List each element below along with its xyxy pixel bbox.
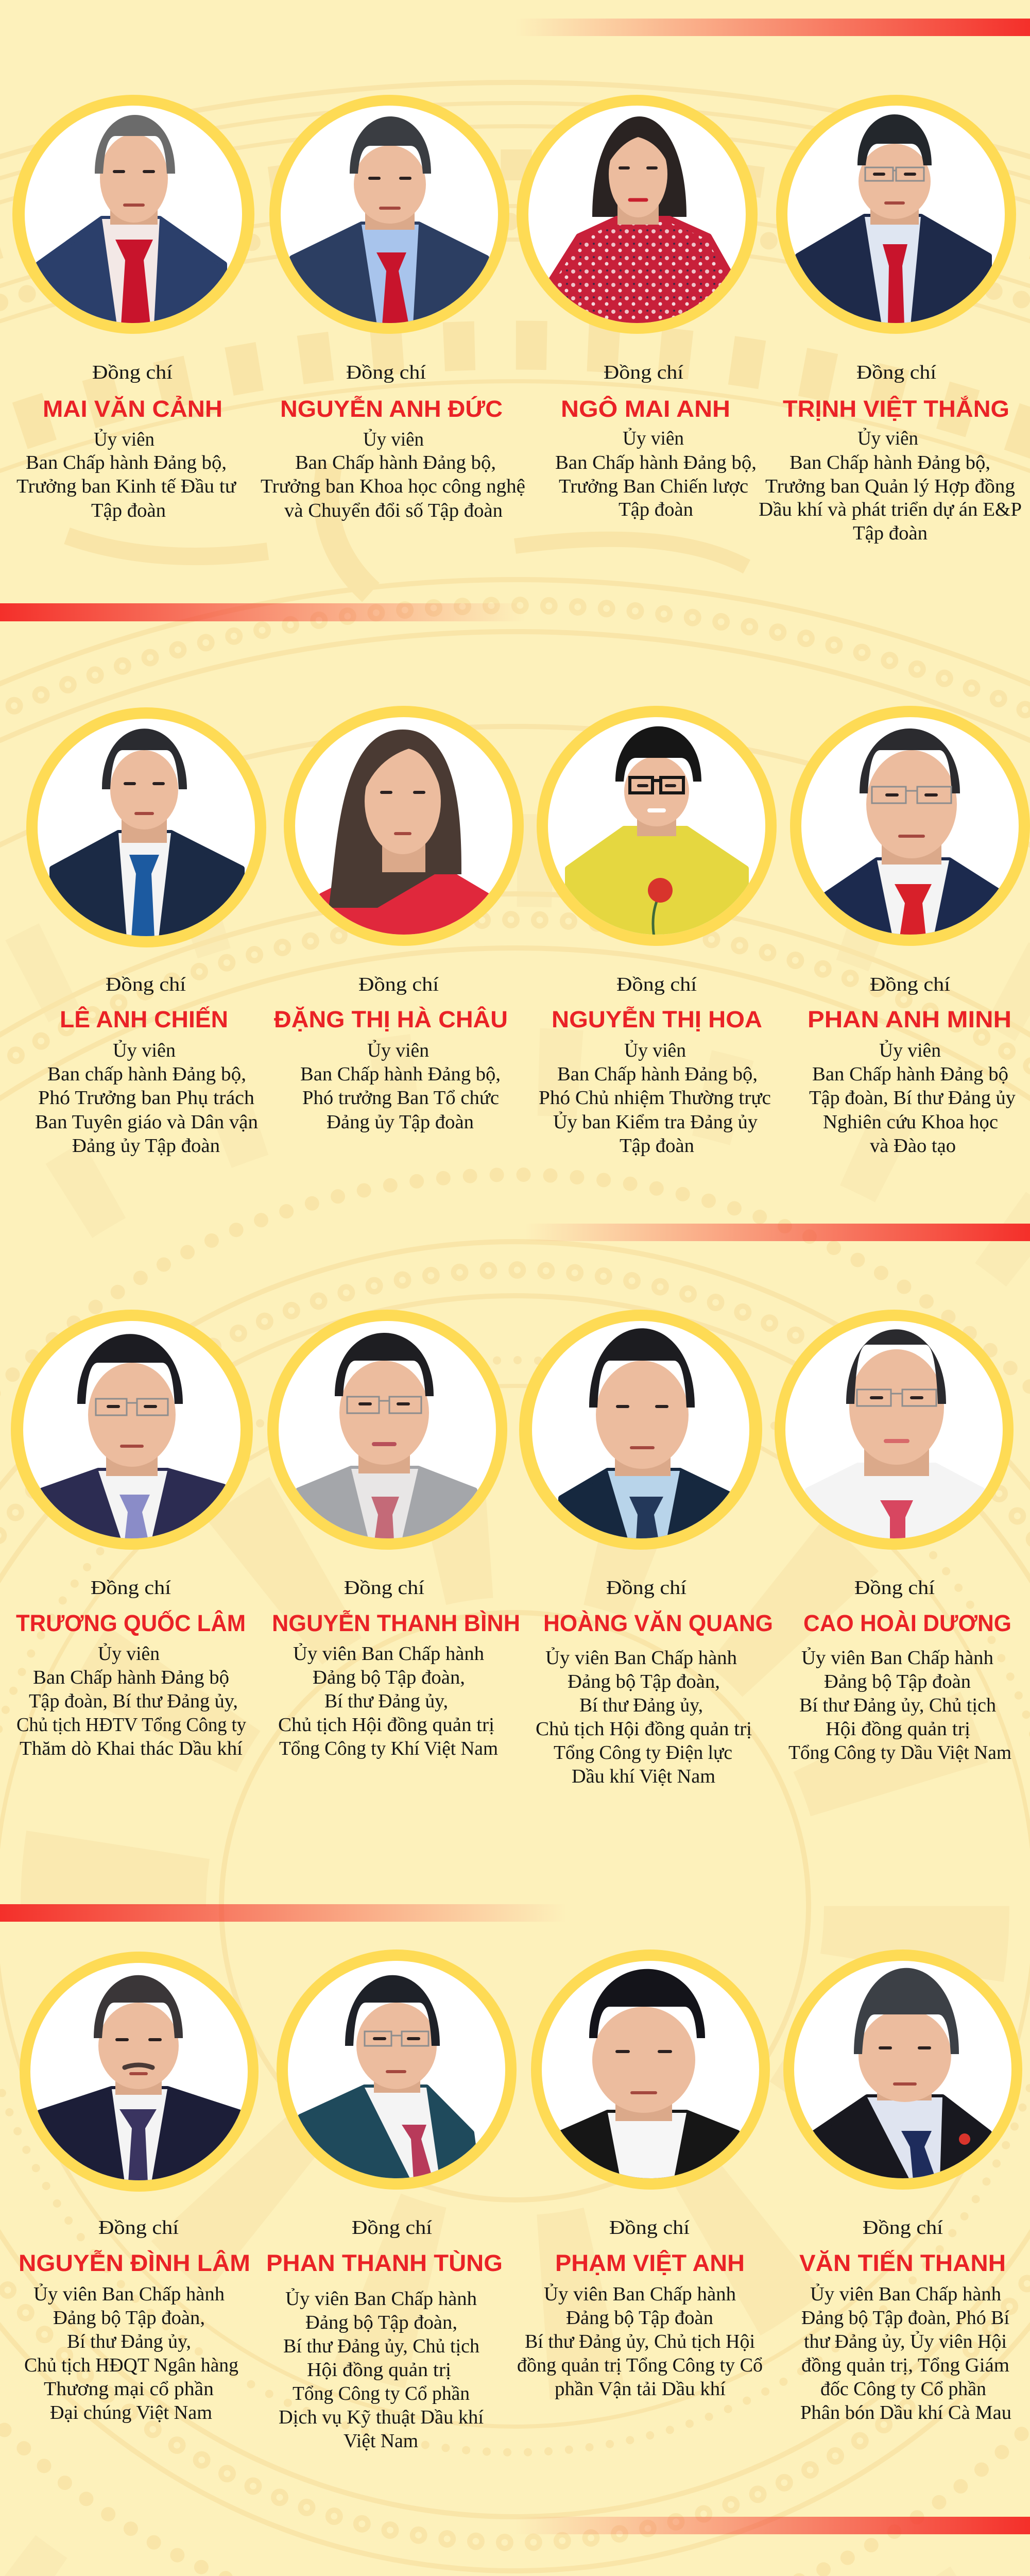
role: Ban Chấp hành Đảng bộ <box>812 1063 1008 1085</box>
photo frame <box>26 707 266 947</box>
role: Việt Nam <box>344 2430 418 2452</box>
member: Phạm Việt Anh <box>517 1950 770 2400</box>
role: Chủ tịch HĐTV Tổng Công ty <box>16 1714 246 1736</box>
role: Đảng bộ Tập đoàn <box>566 2307 713 2329</box>
role: Bí thư Đảng ủy, <box>324 1690 448 1712</box>
accent bar 4 <box>0 1904 566 1922</box>
portrait <box>787 106 1005 323</box>
photo frame <box>277 1950 517 2190</box>
portrait <box>25 106 242 323</box>
role: Tập đoàn <box>619 499 693 520</box>
portrait <box>527 1316 754 1553</box>
photo frame <box>537 706 777 946</box>
member: Nguyễn Anh Đức <box>261 95 525 521</box>
role: Bí thư Đảng ủy, <box>579 1694 703 1716</box>
role: Ủy viên Ban Chấp hành <box>33 2283 225 2305</box>
name: CAO HOÀI DƯƠNG <box>803 1610 1011 1636</box>
role: Đảng bộ Tập đoàn, <box>313 1667 465 1688</box>
name: PHAN ANH MINH <box>808 1006 1011 1032</box>
label: Đồng chí <box>91 1577 171 1599</box>
role: Ủy viên Ban Chấp hành <box>810 2283 1001 2305</box>
portrait <box>789 1956 1016 2193</box>
role: Thương mại cổ phần <box>44 2378 214 2400</box>
role: Trưởng ban Kinh tế Đầu tư <box>16 476 236 497</box>
role: Đảng bộ Tập đoàn, <box>53 2307 205 2329</box>
name: ĐẶNG THỊ HÀ CHÂU <box>274 1006 508 1032</box>
name: NGUYỄN ĐÌNH LÂM <box>19 2250 250 2276</box>
role: Hội đồng quản trị <box>307 2359 451 2381</box>
name: HOÀNG VĂN QUANG <box>543 1610 773 1636</box>
role: đồng quản trị Tổng Công ty Cổ <box>517 2354 763 2376</box>
photo frame <box>284 706 524 946</box>
photo frame <box>775 1310 1014 1550</box>
name: MAI VĂN CẢNH <box>43 396 222 422</box>
role: Bí thư Đảng ủy, Chủ tịch <box>283 2335 479 2357</box>
label: Đồng chí <box>344 1577 424 1599</box>
role: Ủy ban Kiểm tra Đảng ủy <box>553 1111 758 1133</box>
role: Ban Chấp hành Đảng bộ, <box>557 1063 758 1085</box>
role: Tập đoàn <box>853 522 928 544</box>
role: Ủy viên <box>857 427 918 449</box>
role: Bí thư Đảng ủy, Chủ tịch Hội <box>525 2331 755 2352</box>
role: Phân bón Dầu khí Cà Mau <box>800 2402 1011 2424</box>
role: Ủy viên <box>363 428 424 450</box>
role: Đảng bộ Tập đoàn, <box>305 2312 457 2333</box>
role: Nghiên cứu Khoa học <box>823 1111 998 1133</box>
role: Tập đoàn, Bí thư Đảng ủy <box>809 1087 1016 1109</box>
role: thư Đảng ủy, Ủy viên Hội <box>804 2330 1007 2352</box>
name: VĂN TIẾN THANH <box>799 2250 1006 2276</box>
role: đồng quản trị, Tổng Giám <box>801 2354 1009 2376</box>
role: Ủy viên <box>879 1039 941 1061</box>
photo frame <box>776 95 1016 334</box>
role: Trưởng ban Khoa học công nghệ <box>261 476 525 497</box>
label: Đồng chí <box>606 1577 686 1599</box>
role: Ủy viên <box>113 1039 176 1061</box>
role: Tổng Công ty Khí Việt Nam <box>279 1738 498 1759</box>
portrait <box>543 713 770 950</box>
role: Ủy viên <box>98 1642 160 1665</box>
photo frame <box>267 1310 507 1550</box>
role <box>800 2283 1011 2424</box>
role: Bí thư Đảng ủy, <box>67 2331 191 2352</box>
role: Ủy viên Ban Chấp hành <box>293 1642 484 1665</box>
member: Cao Hoài Dương <box>775 1310 1014 1764</box>
role: Phó trưởng Ban Tổ chức <box>302 1087 499 1109</box>
member: Đặng Thị Hà Châu <box>274 706 524 1133</box>
label: Đồng chí <box>609 2217 690 2239</box>
role: Đảng ủy Tập đoàn <box>327 1111 474 1133</box>
name: NGUYỄN THỊ HOA <box>552 1006 762 1032</box>
role: Bí thư Đảng ủy, Chủ tịch <box>799 1694 996 1716</box>
role <box>279 2287 484 2452</box>
name: PHẠM VIỆT ANH <box>555 2250 745 2276</box>
member: Nguyễn Đình Lâm <box>19 1952 259 2424</box>
role: Chủ tịch Hội đồng quản trị <box>278 1714 494 1736</box>
photo frame <box>531 1950 770 2190</box>
accent bar 5 <box>515 2517 1030 2534</box>
role: Đảng ủy Tập đoàn <box>72 1135 220 1157</box>
label: Đồng chí <box>352 2217 432 2239</box>
portrait <box>537 1956 764 2193</box>
role <box>16 428 236 521</box>
role <box>539 1039 771 1157</box>
photo frame <box>519 1310 762 1550</box>
role: Ủy viên Ban Chấp hành <box>801 1647 993 1669</box>
portrait <box>274 1316 501 1553</box>
role: Trưởng ban Quản lý Hợp đồng <box>765 476 1015 497</box>
member: Mai Văn Cảnh <box>12 95 254 521</box>
label: Đồng chí <box>92 362 173 383</box>
role: Ban Chấp hành Đảng bộ <box>33 1667 229 1688</box>
name: TRƯƠNG QUỐC LÂM <box>16 1610 246 1636</box>
role: Ủy viên <box>94 428 154 450</box>
accent bar 3 <box>525 1224 1030 1241</box>
role <box>759 427 1022 544</box>
member: Văn Tiến Thanh <box>783 1950 1022 2424</box>
role <box>261 428 525 521</box>
role: Hội đồng quản trị <box>826 1718 970 1740</box>
member: Phan Thanh Tùng <box>266 1950 517 2452</box>
role <box>517 2283 763 2400</box>
label: Đồng chí <box>98 2217 179 2239</box>
portrait <box>281 106 498 323</box>
member: Trịnh Việt Thắng <box>759 95 1022 544</box>
name: NGUYỄN ANH ĐỨC <box>280 396 503 422</box>
photo frame <box>269 95 509 334</box>
role: Tập đoàn <box>91 500 166 521</box>
label: Đồng chí <box>863 2217 943 2239</box>
label: Đồng chí <box>358 974 439 995</box>
member: Trương Quốc Lâm <box>11 1310 253 1759</box>
role: Đảng bộ Tập đoàn, Phó Bí <box>801 2307 1009 2329</box>
member: Hoàng Văn Quang <box>519 1310 773 1787</box>
role: Dịch vụ Kỹ thuật Dầu khí <box>279 2406 484 2428</box>
role: Ban Chấp hành Đảng bộ, <box>300 1063 501 1085</box>
role: Ủy viên Ban Chấp hành <box>544 2283 736 2305</box>
role <box>555 427 757 520</box>
role: Phó Chủ nhiệm Thường trực <box>539 1087 771 1109</box>
role: Đại chúng Việt Nam <box>50 2402 212 2424</box>
role: Đảng bộ Tập đoàn <box>824 1671 971 1692</box>
role: đốc Công ty Cổ phần <box>820 2378 986 2400</box>
name: TRỊNH VIỆT THẮNG <box>783 396 1009 422</box>
name: NGUYỄN THANH BÌNH <box>272 1610 520 1636</box>
photo frame <box>20 1952 259 2192</box>
portrait <box>26 1958 252 2195</box>
role: Phó Trưởng ban Phụ trách <box>38 1087 254 1109</box>
role <box>24 2283 238 2424</box>
member: Lê Anh Chiến <box>26 707 266 1157</box>
role: và Chuyển đổi số Tập đoàn <box>284 500 503 521</box>
label: Đồng chí <box>604 362 683 383</box>
role <box>35 1039 258 1157</box>
role <box>300 1039 501 1133</box>
role: Ban Chấp hành Đảng bộ, <box>295 452 496 473</box>
role: Chủ tịch HĐQT Ngân hàng <box>24 2354 238 2376</box>
role: Ủy viên <box>624 1039 686 1061</box>
name: NGÔ MAI ANH <box>561 396 730 422</box>
role: Đảng bộ Tập đoàn, <box>568 1671 720 1692</box>
portrait <box>283 1956 510 2193</box>
role: Thăm dò Khai thác Dầu khí <box>20 1738 243 1759</box>
portrait <box>38 719 255 936</box>
role: phần Vận tải Dầu khí <box>555 2378 726 2400</box>
member: Ngô Mai Anh <box>517 95 758 520</box>
label: Đồng chí <box>616 974 697 995</box>
accent bar 2 <box>0 603 525 621</box>
role: Dầu khí Việt Nam <box>572 1766 715 1787</box>
role: Tập đoàn <box>620 1135 694 1157</box>
role: Chủ tịch Hội đồng quản trị <box>536 1718 752 1740</box>
role: Trưởng Ban Chiến lược <box>559 476 748 497</box>
portrait <box>781 1316 1007 1553</box>
role: Tổng Công ty Điện lực <box>554 1742 732 1764</box>
label: Đồng chí <box>346 362 426 383</box>
photo frame <box>517 95 758 334</box>
member: Nguyễn Thanh Bình <box>267 1310 520 1759</box>
role: Ban Chấp hành Đảng bộ, <box>789 452 990 473</box>
label: Đồng chí <box>856 362 936 383</box>
role: Ủy viên <box>623 427 684 449</box>
role: Ban chấp hành Đảng bộ, <box>47 1063 246 1085</box>
name: LÊ ANH CHIẾN <box>60 1006 228 1032</box>
role: Ủy viên <box>367 1039 429 1061</box>
role <box>536 1647 752 1787</box>
role: Tổng Công ty Dầu Việt Nam <box>788 1742 1011 1764</box>
photo frame <box>790 706 1030 946</box>
role <box>809 1039 1016 1157</box>
member: Phan Anh Minh <box>790 706 1030 1157</box>
role: Tập đoàn, Bí thư Đảng ủy, <box>29 1690 238 1712</box>
role: Tổng Công ty Cổ phần <box>293 2383 470 2404</box>
role: Ban Chấp hành Đảng bộ, <box>555 452 757 473</box>
portrait <box>290 713 517 950</box>
role: Ủy viên Ban Chấp hành <box>285 2287 477 2310</box>
role: Ban Chấp hành Đảng bộ, <box>26 452 227 473</box>
portrait <box>528 106 746 323</box>
label: Đồng chí <box>870 974 950 995</box>
photo frame <box>12 95 254 334</box>
role: và Đào tạo <box>870 1135 956 1157</box>
role <box>788 1647 1011 1764</box>
role: Dầu khí và phát triển dự án E&P <box>759 499 1022 520</box>
label: Đồng chí <box>854 1577 935 1599</box>
label: Đồng chí <box>106 974 186 995</box>
role <box>16 1642 246 1759</box>
photo frame <box>783 1950 1022 2190</box>
role: Ủy viên Ban Chấp hành <box>545 1647 737 1669</box>
portrait <box>19 1316 245 1553</box>
photo frame <box>11 1310 253 1550</box>
portrait <box>797 713 1023 950</box>
role <box>278 1642 498 1759</box>
name: PHAN THANH TÙNG <box>266 2250 503 2276</box>
member: Nguyễn Thị Hoa <box>537 706 777 1157</box>
role: Ban Tuyên giáo và Dân vận <box>35 1111 258 1133</box>
accent bar 1 <box>515 19 1030 36</box>
